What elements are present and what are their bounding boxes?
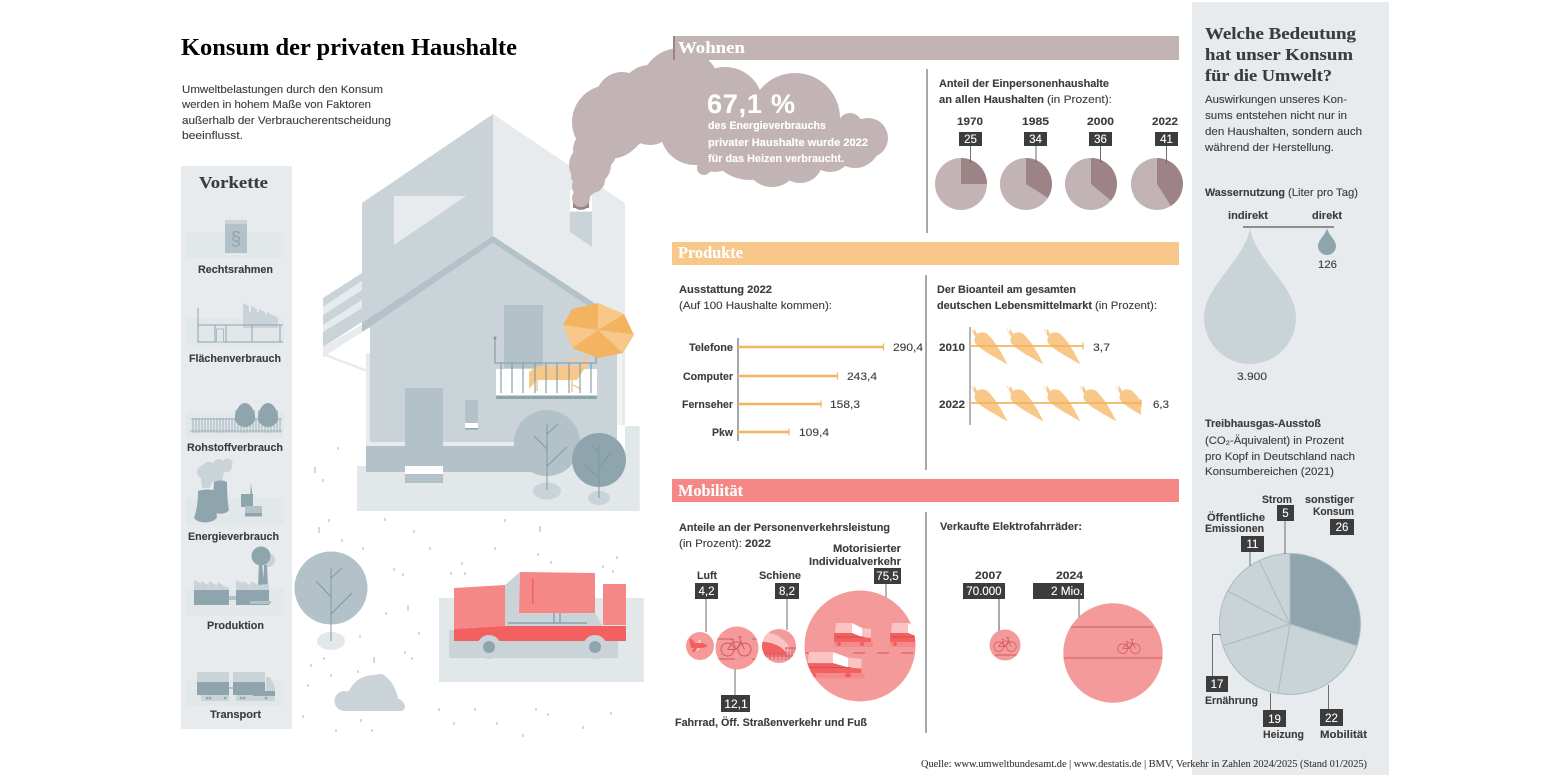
body text: sums entstehen nicht nur in [1205, 110, 1347, 122]
body text [1204, 94, 1362, 154]
section header: Wohnen: Wohnen [678, 38, 746, 57]
small window [465, 400, 478, 430]
chart: Ausstattung 2022 [679, 275, 926, 470]
bar: Computer [683, 371, 877, 383]
chart heading: an allen Haushalten [939, 94, 1044, 106]
chart: Treibhausgas-Ausstoß: Konsumbereichen (2021) [1205, 466, 1334, 478]
label: Öffentliche Emissionen: Emissionen [1205, 523, 1264, 535]
chart: Treibhausgas-Ausstoß: pro Kopf in Deutschland nach [1205, 451, 1355, 463]
roof band [362, 236, 617, 332]
label: Strom: 5 [1282, 508, 1289, 520]
chimney [570, 190, 592, 247]
bar: Telefone: Telefone [689, 342, 733, 354]
bubble: Motorisierter Individualverkehr: 75,5 [876, 571, 899, 583]
label: Heizung [1263, 693, 1304, 741]
source line: Quelle: www.umweltbundesamt.de | www.destatis.de | BMV, Verkehr in Zahlen 2024/2025 (Stand 01/2025) [921, 759, 1367, 770]
section header: Produkte: Produkte [678, 243, 743, 262]
icon: Rechtsrahmen: § [231, 229, 241, 250]
chart heading: deutschen Lebensmittelmarkt [937, 300, 1092, 312]
icon: Flächenverbrauch [186, 303, 284, 345]
icon: Transport [186, 672, 284, 706]
bubble: Schiene: Schiene [759, 570, 801, 582]
heading: Vorkette: Vorkette [199, 173, 268, 192]
row 2022: 2022 [939, 399, 965, 411]
pie 2022: 2022 [1152, 116, 1178, 128]
smoke cloud [569, 48, 888, 207]
bubble: Luft [686, 570, 718, 660]
intro text: Umweltbelastungen durch den Konsum [182, 84, 383, 96]
chart heading [679, 522, 890, 550]
row 2010: 2010 [939, 342, 965, 354]
label: Rohstoffverbrauch: Rohstoffverbrauch [187, 442, 283, 454]
bubble: Luft: Luft [697, 570, 717, 582]
bubble: 2024 [1033, 570, 1163, 703]
label: sonstiger Konsum: 26 [1336, 522, 1348, 534]
label: Energieverbrauch: Energieverbrauch [188, 531, 279, 543]
intro text: beeinflusst. [182, 130, 243, 142]
panel: Welche Bedeutung [1192, 2, 1389, 775]
bar: Pkw: Pkw [712, 427, 733, 439]
chart heading: Anteile an der Personenverkehrsleistung [679, 522, 890, 534]
chart heading: (in Prozent): [1095, 300, 1157, 312]
bar: Computer: 243,4 [847, 371, 877, 383]
pie 1970: 1970 [957, 116, 983, 128]
section header: Mobilität: Mobilität [678, 481, 743, 500]
bubble: 2007: 2007 [975, 570, 1002, 582]
bar: Pkw: 109,4 [799, 427, 829, 439]
bar: Pkw [712, 427, 829, 439]
row 2022: 6,3 [1153, 399, 1169, 411]
label: Mobilität: Mobilität [1320, 729, 1367, 741]
parasol [563, 303, 634, 358]
bubble: 2007: 70.000 [966, 586, 1002, 598]
bar: Fernseher: 158,3 [830, 399, 860, 411]
intro text [181, 84, 391, 142]
bubble: 2024: 2 Mio. [1051, 586, 1083, 598]
label: Heizung: 19 [1268, 714, 1281, 726]
bubble: Luft: 4,2 [698, 586, 714, 598]
chart heading: Ausstattung 2022 [679, 284, 772, 296]
label: Produktion: Produktion [207, 620, 264, 632]
upper window [394, 196, 466, 245]
chart heading: (in Prozent): [679, 538, 742, 550]
label: Öffentliche Emissionen: 11 [1247, 539, 1258, 551]
chart: Wassernutzung [1204, 187, 1358, 383]
section header: Mobilität [672, 479, 1179, 502]
chart heading: 2022 [745, 538, 771, 550]
tree: large [514, 410, 580, 500]
label: Öffentliche Emissionen: Öffentliche [1207, 511, 1265, 524]
pie 1985: 1985 [1022, 116, 1049, 128]
balcony door [504, 305, 543, 368]
chart: Einpersonenhaushalte [927, 69, 1183, 233]
row 2022 [939, 386, 1169, 421]
bar: Fernseher: Fernseher [682, 399, 734, 411]
chart heading [939, 78, 1112, 106]
pie 2022: 41 [1160, 134, 1173, 146]
callout: 67,1 % [707, 89, 868, 165]
illustration: tree left [294, 552, 368, 650]
row 2010: 3,7 [1093, 342, 1110, 354]
bubble: Motorisierter Individualverkehr: Motorisierter [833, 543, 902, 555]
body text: während der Herstellung. [1204, 142, 1334, 154]
chart: Wassernutzung: 3.900 [1237, 371, 1267, 383]
lower house front [370, 243, 617, 442]
heading: hat unser Konsum [1205, 45, 1353, 64]
bubble: Fahrrad: 12,1 [724, 697, 748, 711]
title: Konsum der privaten Haushalte [181, 35, 517, 61]
label: Rechtsrahmen: Rechtsrahmen [198, 264, 273, 276]
body text: Auswirkungen unseres Kon- [1205, 94, 1347, 106]
chart: Wassernutzung: (Liter pro Tag) [1288, 187, 1358, 199]
pie 2000: 36 [1094, 134, 1107, 146]
section header: Wohnen [673, 36, 1179, 60]
label: Transport: Transport [210, 709, 261, 721]
label: Ernährung: 17 [1211, 679, 1223, 691]
base [370, 442, 540, 446]
bubble: 2024: 2024 [1056, 570, 1084, 582]
label: Strom: Strom [1262, 494, 1292, 506]
chart heading: Der Bioanteil am gesamten [937, 284, 1076, 296]
chart heading [679, 284, 832, 312]
label: Strom [1262, 494, 1294, 554]
bubble: Motorisierter Individualverkehr [804, 544, 916, 702]
chart: Personenverkehrsleistung [675, 522, 929, 729]
chart: Wassernutzung: Wassernutzung [1205, 187, 1285, 199]
bubble: 2007 [963, 570, 1020, 660]
panel: Vorkette [181, 166, 292, 729]
pie 1985: 34 [1029, 134, 1042, 146]
chart: Treibhausgas-Ausstoß: Treibhausgas-Ausstoß [1205, 418, 1321, 430]
bubble: Schiene [759, 570, 801, 663]
pie 2000: 2000 [1087, 116, 1114, 128]
scattered ground ticks [303, 447, 617, 737]
pie 2000 [1065, 116, 1117, 210]
bar: Telefone: 290,4 [893, 342, 923, 354]
label: Heizung: Heizung [1263, 729, 1304, 741]
section header: Produkte [672, 242, 1179, 265]
pie [1220, 553, 1360, 694]
icon: Produktion [186, 546, 284, 616]
label: Ernährung [1205, 634, 1258, 707]
heading [1205, 24, 1357, 85]
bar: Computer: Computer [683, 371, 734, 383]
label: Mobilität [1320, 685, 1367, 741]
bar: Fernseher [682, 399, 860, 411]
label: Flächenverbrauch: Flächenverbrauch [189, 353, 281, 365]
label: sonstiger Konsum: Konsum [1313, 506, 1354, 518]
front door [405, 388, 443, 483]
illustration: bush [334, 674, 405, 711]
illustration: house [323, 114, 640, 511]
row 2010 [939, 329, 1110, 364]
ground under house [357, 426, 640, 511]
label: Ernährung: Ernährung [1205, 695, 1258, 707]
heading: für die Umwelt? [1205, 66, 1332, 85]
callout: 67,1 %: des Energieverbrauchs [708, 120, 826, 132]
chart: Bioanteil [937, 284, 1169, 425]
chart heading: (in Prozent): [1047, 94, 1112, 106]
deck chair [529, 353, 587, 392]
pie 2022 [1131, 116, 1183, 210]
chart: Elektrofahrräder [926, 512, 1163, 733]
chart heading: Anteil der Einpersonenhaushalte [939, 78, 1109, 90]
chart heading: Verkaufte Elektrofahrräder: [940, 521, 1082, 533]
chart: Treibhausgas-Ausstoß: (CO₂-Äquivalent) in Prozent [1205, 435, 1344, 447]
chart: Wassernutzung: 126 [1318, 259, 1337, 271]
intro text: außerhalb der Verbraucherentscheidung [182, 115, 391, 127]
icon: Rohstoffverbrauch [186, 403, 284, 438]
chart: Wassernutzung: direkt [1312, 210, 1342, 222]
callout: 67,1 %: für das Heizen verbraucht. [708, 153, 844, 165]
bubble: Fahrrad [675, 626, 867, 729]
label: sonstiger Konsum [1305, 494, 1355, 535]
icon: Rechtsrahmen [186, 220, 284, 258]
illustration: car [439, 572, 644, 682]
chart: Wassernutzung: indirekt [1228, 210, 1268, 222]
callout: 67,1 %: 67,1 % [707, 89, 795, 119]
pie 1970: 25 [964, 134, 977, 146]
balcony [494, 336, 597, 399]
label: Mobilität: 22 [1325, 713, 1338, 725]
chart: Treibhausgas-Ausstoß [1205, 418, 1367, 741]
bubble: Motorisierter Individualverkehr: Individualverkehr [809, 556, 902, 568]
pie 1970 [935, 116, 987, 210]
body text: den Haushalten, sondern auch [1205, 126, 1362, 138]
icon: Energieverbrauch [186, 458, 284, 525]
pie 1985 [1000, 116, 1052, 210]
heading: Welche Bedeutung [1205, 24, 1357, 43]
label: sonstiger Konsum: sonstiger [1305, 494, 1355, 506]
chimney mouth over smoke [573, 205, 589, 210]
label: Öffentliche Emissionen [1205, 511, 1265, 566]
chart heading [937, 284, 1157, 312]
bar: Telefone [689, 342, 923, 354]
callout: 67,1 %: privater Haushalte wurde 2022 [708, 137, 868, 149]
bubble: Schiene: 8,2 [779, 586, 795, 598]
bubble: Fahrrad: Fahrrad, Öff. Straßenverkehr und Fuß [675, 716, 867, 729]
tree: small [572, 433, 626, 505]
intro text: werden in hohem Maße von Faktoren [181, 99, 371, 111]
chart heading: (Auf 100 Haushalte kommen): [679, 300, 832, 312]
side slats [323, 273, 370, 372]
